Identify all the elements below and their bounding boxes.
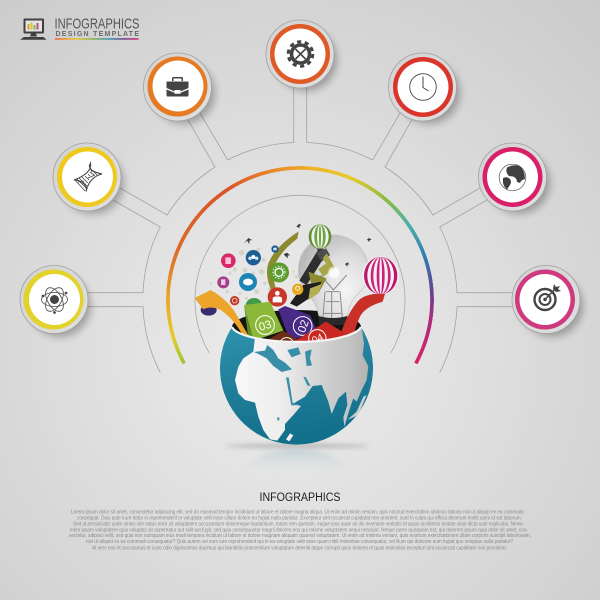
world map land [235, 328, 368, 441]
icon circle: pink [221, 253, 236, 268]
icon circle: red person [268, 287, 287, 307]
rainbow arc [166, 166, 434, 364]
body text: sectetur, adipisci velit, sed quia non numquam eius modi tempora incidunt ut labore et dolore magnam aliquam quaerat voluptatem. Ut enim ad minima veniam, quis nostrum exercitationem ullam corporis suscipit laboriosam, [69, 533, 531, 539]
icon: globe [499, 164, 526, 191]
node: gear [266, 20, 337, 91]
body text: enim ipsam voluptatem quia voluptas sit aspernatur aut odit aut fugit, sed quia consequuntur magni dolores eos qui ratione voluptatem sequi nesciunt. Neque porro quisquam est, qui dolorem ipsum quia dolor sit amet, con- [70, 528, 528, 534]
red arrow [341, 294, 385, 334]
body text: nisi ut aliquid ex ea commodi consequatur? Quis autem vel eum iure reprehenderit qui in ea voluptate velit esse quam nihil molestiae consequatur, vel illum qui dolorem eum fugiat quo voluptas nulla pariatur? [86, 539, 513, 545]
globe body [220, 327, 373, 445]
icon: target [534, 284, 561, 310]
balloon: pink [362, 257, 399, 295]
dark disc behind ribbon [201, 304, 217, 316]
card: 02: 02 [296, 318, 312, 334]
icon: DNA helix [74, 163, 102, 192]
node: DNA [53, 143, 124, 214]
icon circle: small red [230, 296, 239, 305]
light bulb [298, 235, 368, 325]
icon: clock [410, 74, 436, 100]
icon circle: purple [217, 276, 229, 288]
body text: At vero eos et accusamus et iusto odio dignissimos ducimus qui blanditiis praesentium voluptatum deleniti atque corrupti quos dolores et quas molestias excepturi sint occaecati cupiditate non provident. [92, 546, 507, 552]
logo [20, 16, 140, 40]
icon: atom [42, 285, 68, 314]
body text [69, 510, 531, 552]
icon circle: yellow pin [292, 284, 303, 295]
globe rim [232, 327, 361, 342]
node: atom [20, 266, 91, 337]
inner thin arc [195, 195, 405, 353]
node: globe [478, 143, 550, 214]
card: 04: 04 [310, 332, 326, 347]
node: target [512, 266, 583, 337]
card: 03: 03 [258, 319, 273, 334]
logo subtitle: DESIGN TEMPLATE [56, 31, 139, 38]
logo title: INFOGRAPHICS [54, 16, 140, 32]
icon circle: speech [239, 273, 257, 291]
opening inside globe [232, 310, 361, 344]
madagascar [286, 433, 293, 441]
small birds [244, 224, 372, 267]
olive ribbon [267, 231, 299, 295]
southeast asia [347, 395, 367, 420]
card: 04 [290, 322, 349, 347]
card: 03 [244, 302, 283, 341]
card: 01 [264, 331, 305, 352]
icon: briefcase [166, 77, 188, 96]
body text: Sed ut perspiciatis unde omnis iste natus error sit voluptatem accusantium doloremque laudantium, totam rem aperiam, eaque ipsa quae ab illo inventore veritatis et quasi architecto beatae vitae dicta sunt explicabo. Nemo [73, 522, 523, 528]
title: INFOGRAPHICS [260, 492, 341, 504]
icon: gear [288, 42, 313, 66]
microscope shape [290, 248, 340, 307]
card: 02 [278, 306, 317, 341]
body text: consequat. Duis aute irure dolor in reprehenderit in voluptate velit esse cillum dolore eu fugiat nulla pariatur. Excepteur sint occaecat cupidatat non proident, sunt in culpa qui officia deserunt mollit anim id est laborum. [77, 516, 522, 522]
green disc behind card [245, 298, 263, 315]
icon circle: green gear [269, 262, 289, 282]
color dots cloud [209, 247, 299, 300]
orange ribbon [195, 290, 251, 340]
icon circle: small blue [271, 245, 279, 253]
seas [254, 345, 312, 420]
body text: Lorem ipsum dolor sit amet, consectetur adipiscing elit, sed do eiusmod tempor incididunt ut labore et dolore magna aliqua. Ut enim ad minim veniam, quis nostrud exercitation ullamco laboris nisi ut aliquip ex ea commodo [71, 510, 524, 516]
node: briefcase [144, 53, 215, 124]
filament [321, 275, 347, 322]
globe shadow [225, 444, 369, 448]
bulb socket [318, 316, 347, 325]
connector lines [88, 87, 512, 373]
contents bursting from globe [195, 224, 399, 352]
node: clock [388, 53, 460, 124]
icon: monitor [20, 18, 46, 40]
icon circle: blue [246, 250, 261, 265]
globe reflection [243, 449, 351, 475]
balloon: green [309, 224, 331, 251]
